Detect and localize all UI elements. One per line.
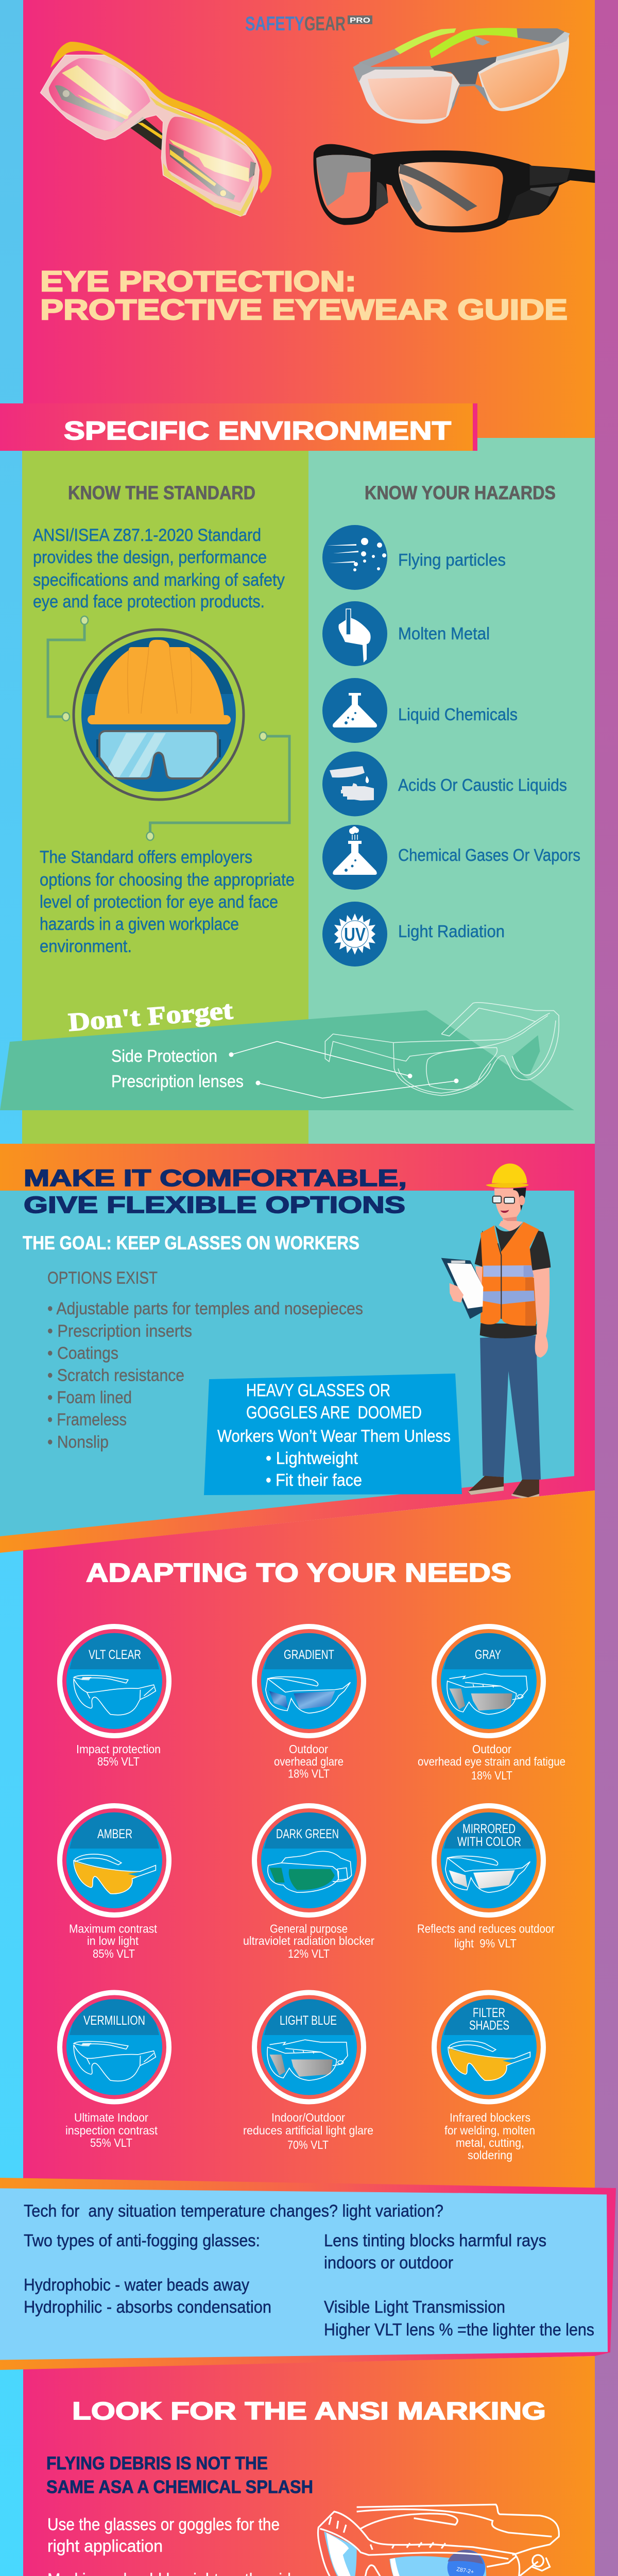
lens: dark green: ultraviolet radiation blocker [243, 1934, 374, 1947]
heading: don't forget: Don't Forget [67, 995, 234, 1037]
hazard: chemical gases or vapors: Chemical Gases Or Vapors [398, 845, 580, 865]
subheading: the goal: THE GOAL: KEEP GLASSES ON WORKERS [23, 1232, 359, 1253]
heading: make it comfortable: MAKE IT COMFORTABLE, [24, 1165, 407, 1191]
lens: gradient: GRADIENT [284, 1648, 334, 1662]
text block: standard options: hazards in a given workplace [40, 914, 239, 934]
text block: standard options: level of protection for eye and face [40, 892, 278, 912]
text block: application: right application [47, 2536, 163, 2555]
connectors around emblem [48, 616, 289, 840]
hazard: light radiation [322, 902, 505, 967]
lens: gray: overhead eye strain and fatigue [418, 1755, 565, 1768]
hazard: liquid chemicals [322, 678, 518, 743]
list: options: • Adjustable parts for temples and nosepieces [47, 1299, 363, 1318]
lens: mirrored with color: Reflects and reduces outdoor [417, 1922, 555, 1935]
hazard: chemical gases or vapors [322, 825, 580, 890]
subheading: flying debris: SAME ASA A CHEMICAL SPLASH [46, 2477, 313, 2497]
banner: specific environment [0, 403, 477, 451]
illustration: worker [441, 1163, 551, 1500]
title [40, 265, 568, 326]
hazard: light radiation: UV [344, 924, 366, 945]
text: options exist: OPTIONS EXIST [47, 1268, 158, 1287]
banner: specific environment: SPECIFIC ENVIRONMENT [64, 416, 451, 445]
lens: light blue: Indoor/Outdoor [271, 2111, 345, 2124]
lens: amber [60, 1806, 169, 1960]
list: options [47, 1299, 363, 1451]
lens: amber: 85% VLT [93, 1947, 135, 1960]
lens: light blue: reduces artificial light glare [243, 2124, 373, 2137]
left side strip [0, 0, 23, 2576]
heading: make it comfortable [24, 1165, 407, 1218]
list: options: • Frameless [47, 1410, 127, 1429]
panel: tech for any situation [0, 2178, 616, 2370]
title: PROTECTIVE EYEWEAR GUIDE [40, 293, 568, 326]
lens: VLT clear: Impact protection [76, 1742, 161, 1756]
text block: standard options: environment. [40, 937, 132, 956]
lens: VLT clear: VLT CLEAR [89, 1648, 141, 1662]
text block: standard options: The Standard offers employers [40, 848, 252, 867]
panel: tech for any situation: Tech for any situation temperature changes? light variation? [24, 2201, 443, 2221]
lens: mirrored with color: WITH COLOR [457, 1835, 521, 1849]
lens: dark green: General purpose [270, 1922, 348, 1935]
lens: light blue [243, 1993, 373, 2151]
lens: light blue: 70% VLT [287, 2138, 329, 2151]
panel: tech for any situation: Higher VLT lens % =the lighter the lens [324, 2320, 594, 2339]
text: prescription lenses: Prescription lenses [111, 1072, 244, 1091]
panel: make it comfortable [0, 1144, 595, 1553]
lens: mirrored with color: light 9% VLT [454, 1937, 517, 1950]
hazard: molten metal: Molten Metal [398, 624, 490, 643]
lens: mirrored with color [417, 1806, 555, 1950]
logo: SafetyGear Pro: GEAR [304, 13, 346, 35]
text block: standard options [40, 848, 295, 956]
hazard: molten metal [322, 601, 490, 666]
lens: amber: AMBER [97, 1827, 132, 1841]
subheading: flying debris: FLYING DEBRIS IS NOT THE [46, 2453, 268, 2473]
lens: amber: in low light [87, 1934, 139, 1947]
lens: filter shades: FILTER [473, 2006, 505, 2020]
callout: heavy glasses: • Fit their face [266, 1470, 362, 1489]
lens: vermillion: Ultimate Indoor [74, 2111, 148, 2124]
panel: tech for any situation: Visible Light Transmission [324, 2297, 505, 2316]
lens: vermillion: VERMILLION [83, 2013, 145, 2028]
lens: light blue: LIGHT BLUE [280, 2013, 337, 2028]
icon: hard hat and goggles emblem [74, 630, 244, 800]
lens: dark green: 12% VLT [288, 1947, 330, 1960]
text block: standard intro [33, 526, 285, 612]
lens: dark green [243, 1806, 374, 1960]
hero panel [23, 0, 595, 443]
lens: dark green: DARK GREEN [276, 1827, 339, 1841]
glasses outline with leader lines [229, 1003, 559, 1098]
callout: heavy glasses [204, 1374, 462, 1495]
hazard: light radiation: Light Radiation [398, 922, 505, 941]
callout: heavy glasses: HEAVY GLASSES OR [246, 1381, 390, 1400]
hazard: acids or caustic liquids [322, 751, 567, 816]
panel: adapting to your needs [23, 1490, 595, 2195]
lens: filter shades: SHADES [469, 2019, 509, 2033]
callout: don't forget [0, 995, 574, 1110]
hazard: flying particles: Flying particles [398, 550, 506, 569]
callout: heavy glasses: GOGGLES ARE DOOMED [246, 1403, 422, 1422]
lens: vermillion: inspection contrast [65, 2124, 158, 2137]
heading: know your hazards: KNOW YOUR HAZARDS [365, 482, 556, 503]
panel: tech for any situation: Lens tinting blocks harmful rays [324, 2231, 546, 2250]
callout: heavy glasses: Workers Won’t Wear Them Unless [217, 1426, 451, 1446]
logo: SafetyGear Pro: SAFETY [245, 13, 304, 35]
panel: tech for any situation: Hydrophilic - absorbs condensation [24, 2297, 271, 2316]
right side strip [595, 0, 618, 2576]
lens: filter shades: for welding, molten [444, 2124, 535, 2137]
lens: amber: Maximum contrast [69, 1922, 158, 1935]
text block: standard intro: eye and face protection products. [33, 592, 265, 612]
hazard: acids or caustic liquids: Acids Or Caustic Liquids [398, 775, 567, 794]
panel: tech for any situation: Hydrophobic - water beads away [24, 2275, 249, 2294]
lens: vermillion [60, 1993, 169, 2149]
panel: look for the ANSI marking [23, 2356, 595, 2576]
logo: SafetyGear Pro [245, 13, 372, 35]
list: options: • Scratch resistance [47, 1365, 184, 1385]
lens: gray: GRAY [475, 1648, 501, 1662]
subheading: flying debris [46, 2453, 313, 2497]
text block: application: Use the glasses or goggles for the [47, 2515, 280, 2534]
hazard: flying particles [322, 525, 506, 590]
text block: standard intro: specifications and marking of safety [33, 570, 285, 590]
lens: gray: Outdoor [472, 1742, 511, 1756]
list: options: • Foam lined [47, 1388, 132, 1406]
lens: gray [418, 1626, 565, 1782]
text block: standard options: options for choosing the appropriate [40, 870, 295, 890]
photo: yellow safety glasses [40, 42, 271, 216]
lens: gradient: 18% VLT [288, 1767, 330, 1781]
panel: tech for any situation: Two types of anti-fogging glasses: [24, 2231, 260, 2250]
heading: make it comfortable: GIVE FLEXIBLE OPTIONS [24, 1192, 405, 1218]
lens: VLT clear [60, 1626, 169, 1768]
text block: application [47, 2515, 300, 2576]
heading: know the standard: KNOW THE STANDARD [68, 482, 255, 503]
heading: ANSI marking: LOOK FOR THE ANSI MARKING [72, 2398, 546, 2425]
lens: vermillion: 55% VLT [90, 2136, 132, 2149]
lens: mirrored with color: MIRRORED [462, 1822, 516, 1836]
lens: gradient: overhead glare [274, 1755, 344, 1768]
panel: know the standard [22, 438, 308, 1144]
callout: heavy glasses: • Lightweight [266, 1449, 358, 1467]
heading: adapting: ADAPTING TO YOUR NEEDS [86, 1558, 511, 1587]
hazard: liquid chemicals: Liquid Chemicals [398, 705, 518, 724]
panel: tech for any situation: indoors or outdoor [324, 2253, 453, 2272]
lens: filter shades: soldering [468, 2148, 512, 2162]
photo: black safety glasses [313, 144, 595, 232]
logo: SafetyGear Pro: PRO [350, 16, 370, 25]
lens: gradient: Outdoor [289, 1742, 328, 1756]
list: options: • Nonslip [47, 1432, 109, 1451]
lens: filter shades: Infrared blockers [450, 2111, 530, 2124]
title: EYE PROTECTION: [40, 265, 356, 297]
illustration: goggles with marking: Z87-2+ [456, 2566, 474, 2575]
text block: standard intro: provides the design, performance [33, 548, 267, 567]
lens: VLT clear: 85% VLT [97, 1755, 140, 1768]
photo: grey and lime safety glasses [353, 28, 570, 124]
text: side protection: Side Protection [111, 1046, 217, 1065]
list: options: • Prescription inserts [47, 1321, 192, 1341]
panel: know your hazards [308, 438, 595, 1144]
lens: filter shades: metal, cutting, [456, 2136, 524, 2149]
list: options: • Coatings [47, 1344, 118, 1362]
illustration: goggles with marking [260, 2504, 559, 2576]
text block: standard intro: ANSI/ISEA Z87.1-2020 Standard [33, 526, 261, 545]
lens: gradient [254, 1626, 364, 1781]
lens: filter shades [434, 1993, 543, 2162]
lens: gray: 18% VLT [471, 1769, 512, 1782]
